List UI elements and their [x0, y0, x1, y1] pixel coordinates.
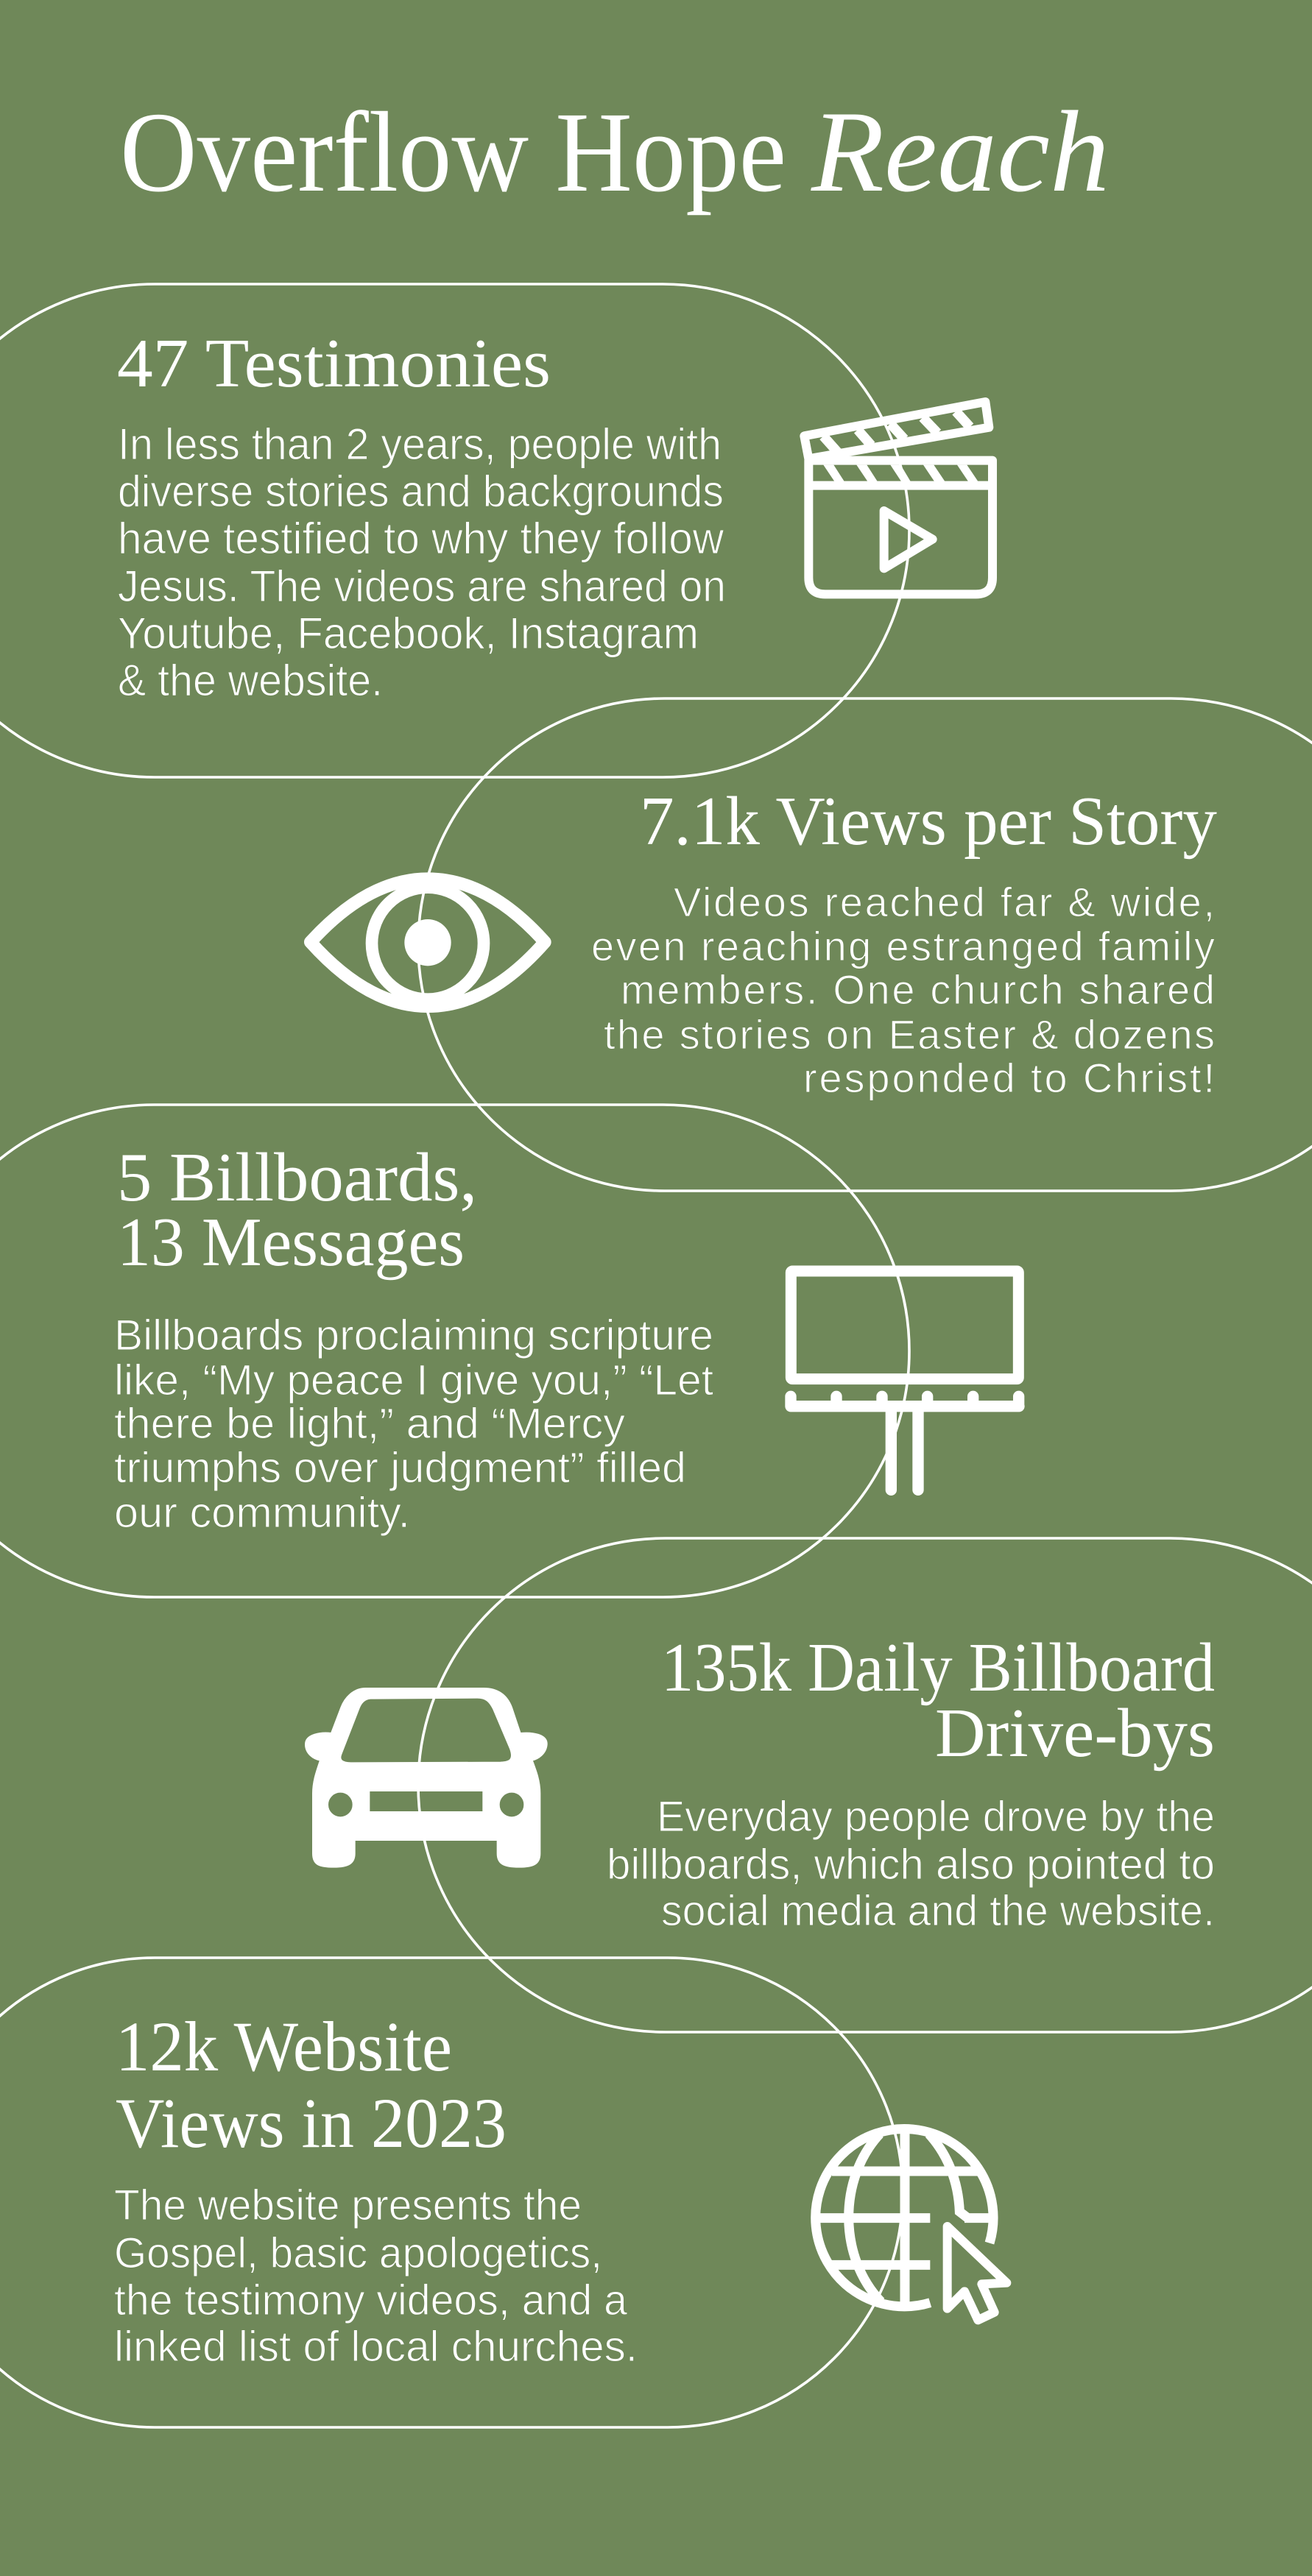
text block: testimonies description: diverse stories and backgrounds: [118, 467, 724, 516]
title: Reach: [811, 88, 1110, 216]
panel: 47 testimonies: [0, 284, 992, 777]
text block: views description: members. One church shared: [621, 966, 1215, 1013]
text block: testimonies description: have testified to why they follow: [118, 514, 724, 563]
heading: 135k Daily Billboard Drive-bys: 135k Daily Billboard: [661, 1630, 1215, 1706]
heading: 47 Testimonies: 47 Testimonies: [117, 325, 551, 402]
text block: testimonies description: Youtube, Facebook, Instagram: [118, 609, 699, 658]
heading: 5 Billboards, 13 Messages: [117, 1139, 477, 1281]
text block: drive-bys description: Everyday people drove by the: [657, 1793, 1215, 1841]
icon: car: [306, 1688, 547, 1867]
text block: billboards description: there be light,” and “Mercy: [114, 1400, 625, 1448]
text block: website description: [114, 2182, 638, 2371]
heading: 135k Daily Billboard Drive-bys: Drive-bys: [935, 1695, 1215, 1772]
text block: website description: Gospel, basic apologetics,: [114, 2229, 602, 2277]
text block: views description: Videos reached far & wide,: [674, 879, 1215, 925]
panel: 7.1k views per story: [311, 698, 1312, 1191]
heading: 12k Website Views in 2023: 12k Website: [116, 2007, 452, 2086]
text block: drive-bys description: billboards, which also pointed to: [607, 1841, 1215, 1889]
text block: views description: the stories on Easter & dozens: [604, 1011, 1215, 1058]
icon: film clapperboard with play button: [804, 402, 992, 594]
title: Overflow Hope: [120, 88, 786, 216]
heading: 7.1k Views per Story: 7.1k Views per Story: [640, 783, 1217, 860]
heading: 5 Billboards, 13 Messages: 5 Billboards,: [117, 1139, 477, 1216]
text block: drive-bys description: [607, 1793, 1215, 1935]
panel: 12k website views in 2023: [0, 1958, 1006, 2427]
text block: website description: linked list of local churches.: [114, 2323, 638, 2371]
text block: billboards description: [114, 1312, 713, 1537]
text block: website description: the testimony videos, and a: [114, 2276, 628, 2324]
text block: testimonies description: [118, 420, 726, 705]
text block: testimonies description: & the website.: [118, 656, 383, 705]
heading: 135k Daily Billboard Drive-bys: [661, 1630, 1215, 1772]
icon: globe with cursor: [815, 2129, 1006, 2320]
text block: website description: The website presents the: [114, 2182, 582, 2229]
text block: views description: even reaching estranged family: [591, 923, 1215, 969]
heading: 5 Billboards, 13 Messages: 13 Messages: [117, 1204, 465, 1281]
heading: 12k Website Views in 2023: [116, 2007, 507, 2162]
text block: views description: responded to Christ!: [803, 1055, 1215, 1101]
text block: billboards description: like, “My peace I give you,” “Let: [114, 1356, 713, 1404]
text block: views description: [591, 879, 1215, 1101]
text block: billboards description: Billboards proclaiming scripture: [114, 1312, 713, 1359]
text block: billboards description: triumphs over judgment” filled: [114, 1444, 686, 1492]
text block: drive-bys description: social media and the website.: [661, 1887, 1215, 1935]
text block: testimonies description: In less than 2 years, people with: [118, 420, 722, 469]
text block: billboards description: our community.: [114, 1489, 410, 1537]
heading: 12k Website Views in 2023: Views in 2023: [116, 2084, 507, 2162]
icon: billboard: [791, 1271, 1019, 1490]
text block: testimonies description: Jesus. The videos are shared on: [118, 562, 726, 611]
panel: 135k daily billboard drive-bys: [306, 1538, 1312, 2032]
icon: eye: [311, 879, 545, 1006]
panel: 5 billboards, 13 messages: [0, 1105, 1019, 1597]
